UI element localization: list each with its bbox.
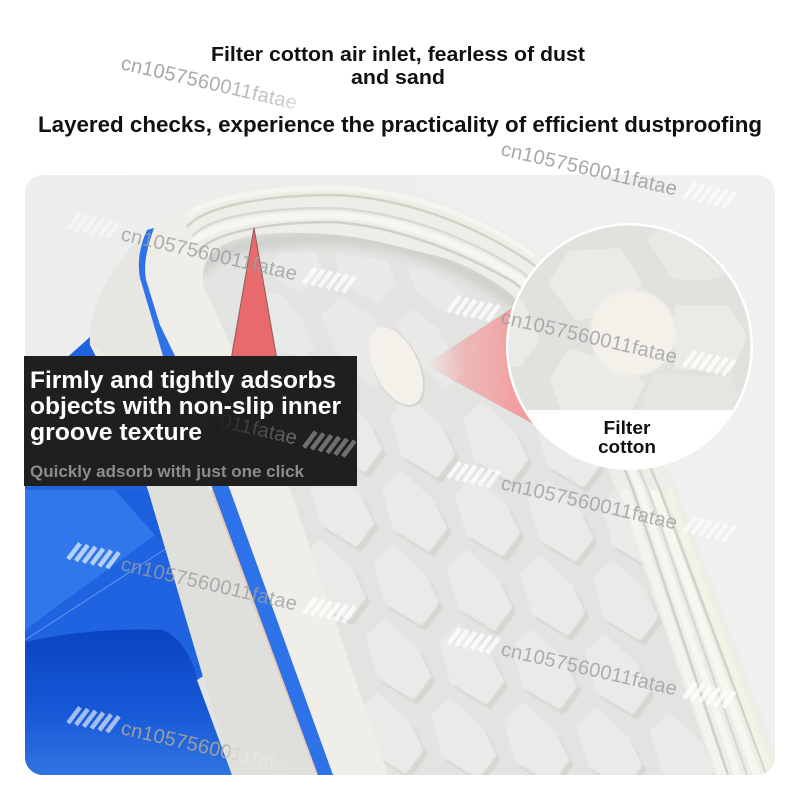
watermark row left 727 <box>66 706 238 760</box>
watermark row right 648: cn1057560011fatae <box>499 638 679 700</box>
callout heading: groove texture <box>30 419 202 446</box>
watermark row top right crossing panel edge <box>499 138 735 213</box>
callout subtext: Quickly adsorb with just one click <box>30 462 305 481</box>
callout heading <box>30 367 341 446</box>
watermark row right 482 <box>447 461 735 547</box>
watermark row right 482: cn1057560011fatae <box>499 472 679 534</box>
filter cotton exposed on mat <box>369 327 425 407</box>
magnifier circle <box>500 220 760 480</box>
callout heading: Firmly and tightly adsorbs <box>30 367 336 394</box>
watermark row left 230: cn1057560011fatae <box>119 223 299 285</box>
upper hexagons <box>250 253 463 388</box>
honeycomb mat with non-slip texture <box>202 232 715 775</box>
subheading: layered checks: Layered checks, experience the practicality of efficient dustproofing <box>38 112 762 137</box>
red cone to magnifier <box>425 308 535 425</box>
callout: dark caption box <box>24 356 357 486</box>
ribs <box>187 188 771 775</box>
watermark row right 316: cn1057560011fatae <box>499 306 679 368</box>
watermark row left 563: cn1057560011fatae <box>119 553 299 615</box>
panel: product photo <box>25 175 775 795</box>
heading: filter cotton air inlet: and sand <box>351 66 445 89</box>
watermark row top right crossing panel edge: cn1057560011fatae <box>499 138 679 200</box>
callout heading: objects with non-slip inner <box>30 393 341 420</box>
watermark row left 563 <box>67 542 355 628</box>
panel background <box>25 175 775 775</box>
white caption band <box>561 410 632 412</box>
cotton close-up <box>590 290 676 376</box>
caption: filter cotton: Filter <box>604 418 650 438</box>
watermark on dark box <box>119 387 355 462</box>
watermark row left 727: cn1057560011fatae <box>119 717 299 779</box>
heading: filter cotton air inlet <box>211 43 585 89</box>
watermark row right 316 <box>447 295 735 381</box>
red pointer triangle to rim <box>231 228 277 360</box>
caption: filter cotton: cotton <box>598 437 656 457</box>
cream outer shell with ribs <box>90 182 775 775</box>
heading: filter cotton air inlet: Filter cotton air inlet, fearless of dust <box>211 43 585 66</box>
hexagon lattice <box>324 429 715 775</box>
watermark row left 230 <box>122 230 356 294</box>
caption: filter cotton <box>598 420 655 453</box>
watermark on dark box: cn1057560011fatae <box>119 387 299 449</box>
watermark row right 648 <box>447 627 735 713</box>
blue filter body <box>25 337 252 775</box>
watermark row top left fading: cn1057560011fatae <box>119 52 299 114</box>
blue stripe <box>139 228 333 775</box>
